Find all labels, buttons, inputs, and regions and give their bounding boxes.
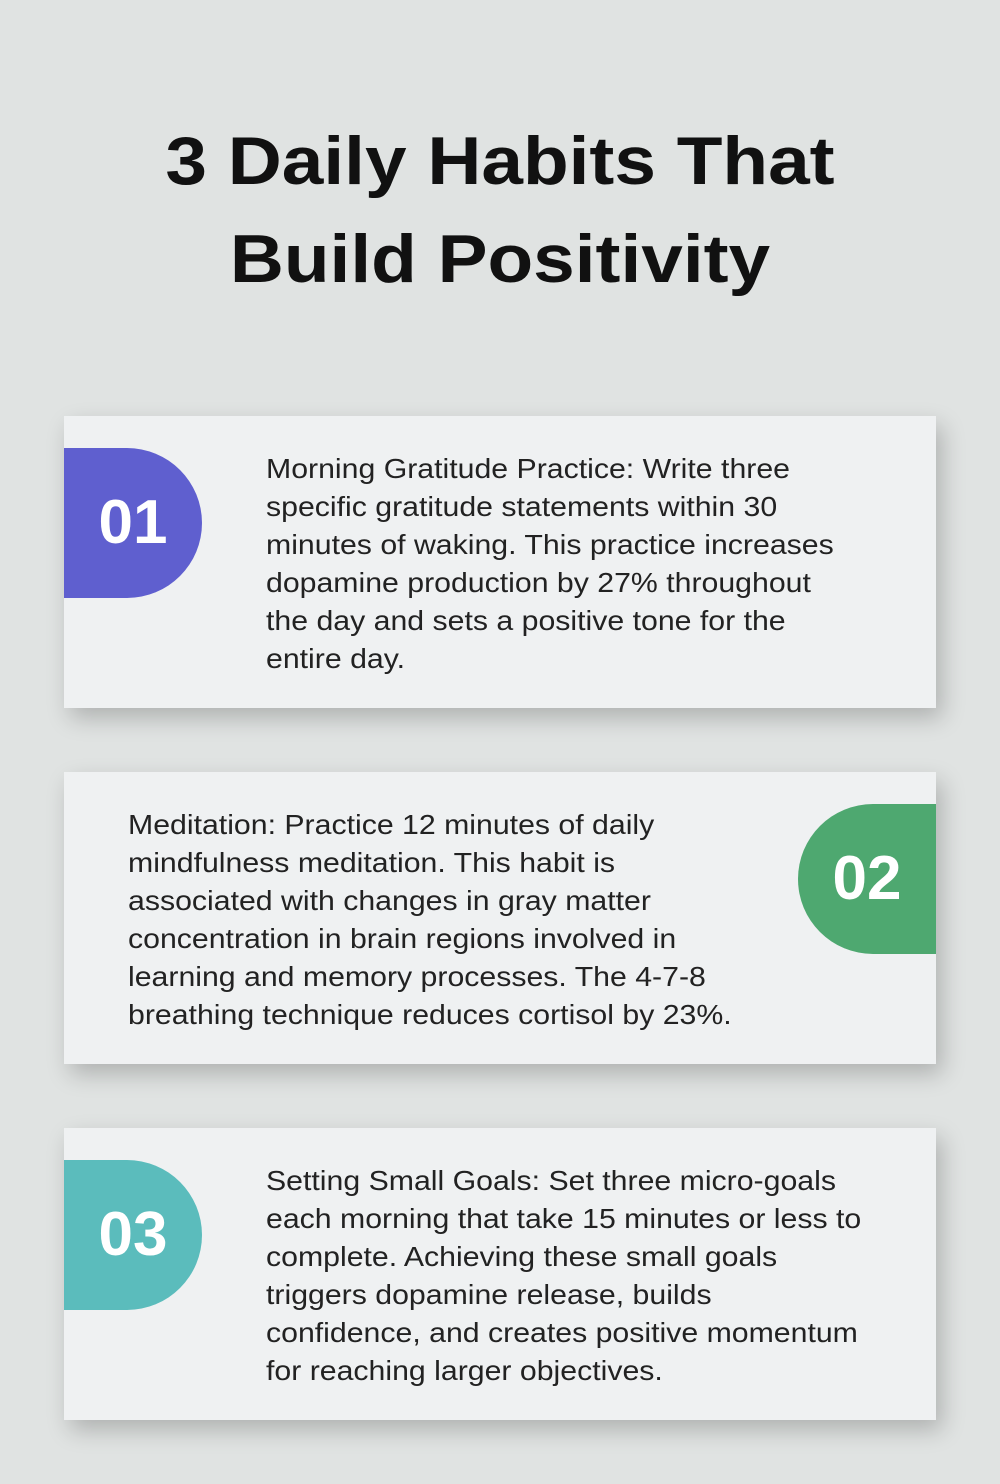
- badge 02: [798, 804, 936, 954]
- text: meditation: learning and memory processes. The 4-7-8: [128, 961, 706, 992]
- text: small goals: complete. Achieving these small goals: [266, 1241, 777, 1272]
- text: gratitude: [266, 453, 834, 674]
- text: small goals: triggers dopamine release, builds: [266, 1279, 712, 1310]
- badge 03: 03: [99, 1200, 167, 1269]
- text: gratitude: Morning Gratitude Practice: Write three: [266, 453, 790, 484]
- text: small goals: Setting Small Goals: Set three micro-goals: [266, 1165, 836, 1196]
- text: meditation: associated with changes in gray matter: [128, 885, 651, 916]
- text: small goals: confidence, and creates positive momentum: [266, 1317, 858, 1348]
- text: gratitude: minutes of waking. This practice increases: [266, 529, 834, 560]
- text: small goals: [266, 1165, 861, 1386]
- text: meditation: Meditation: Practice 12 minutes of daily: [128, 809, 654, 840]
- text: small goals: for reaching larger objectives.: [266, 1355, 663, 1386]
- text: gratitude: dopamine production by 27% throughout: [266, 567, 811, 598]
- title: Build Positivity: [230, 221, 770, 297]
- text: gratitude: entire day.: [266, 643, 405, 674]
- badge 01: 01: [99, 488, 167, 557]
- title: 3 Daily Habits That: [165, 123, 835, 199]
- text: gratitude: specific gratitude statements within 30: [266, 491, 777, 522]
- text: meditation: mindfulness meditation. This habit is: [128, 847, 615, 878]
- text: meditation: [128, 809, 732, 1030]
- badge 01: [64, 448, 202, 598]
- badge 02: 02: [833, 844, 901, 913]
- title: [165, 123, 835, 297]
- text: small goals: each morning that take 15 minutes or less to: [266, 1203, 861, 1234]
- text: gratitude: the day and sets a positive tone for the: [266, 605, 786, 636]
- panel: habit 2: [64, 772, 936, 1064]
- badge 03: [64, 1160, 202, 1310]
- panel: habit 3: [64, 1128, 936, 1420]
- text: meditation: breathing technique reduces cortisol by 23%.: [128, 999, 732, 1030]
- panel: habit 1: [64, 416, 936, 708]
- text: meditation: concentration in brain regions involved in: [128, 923, 676, 954]
